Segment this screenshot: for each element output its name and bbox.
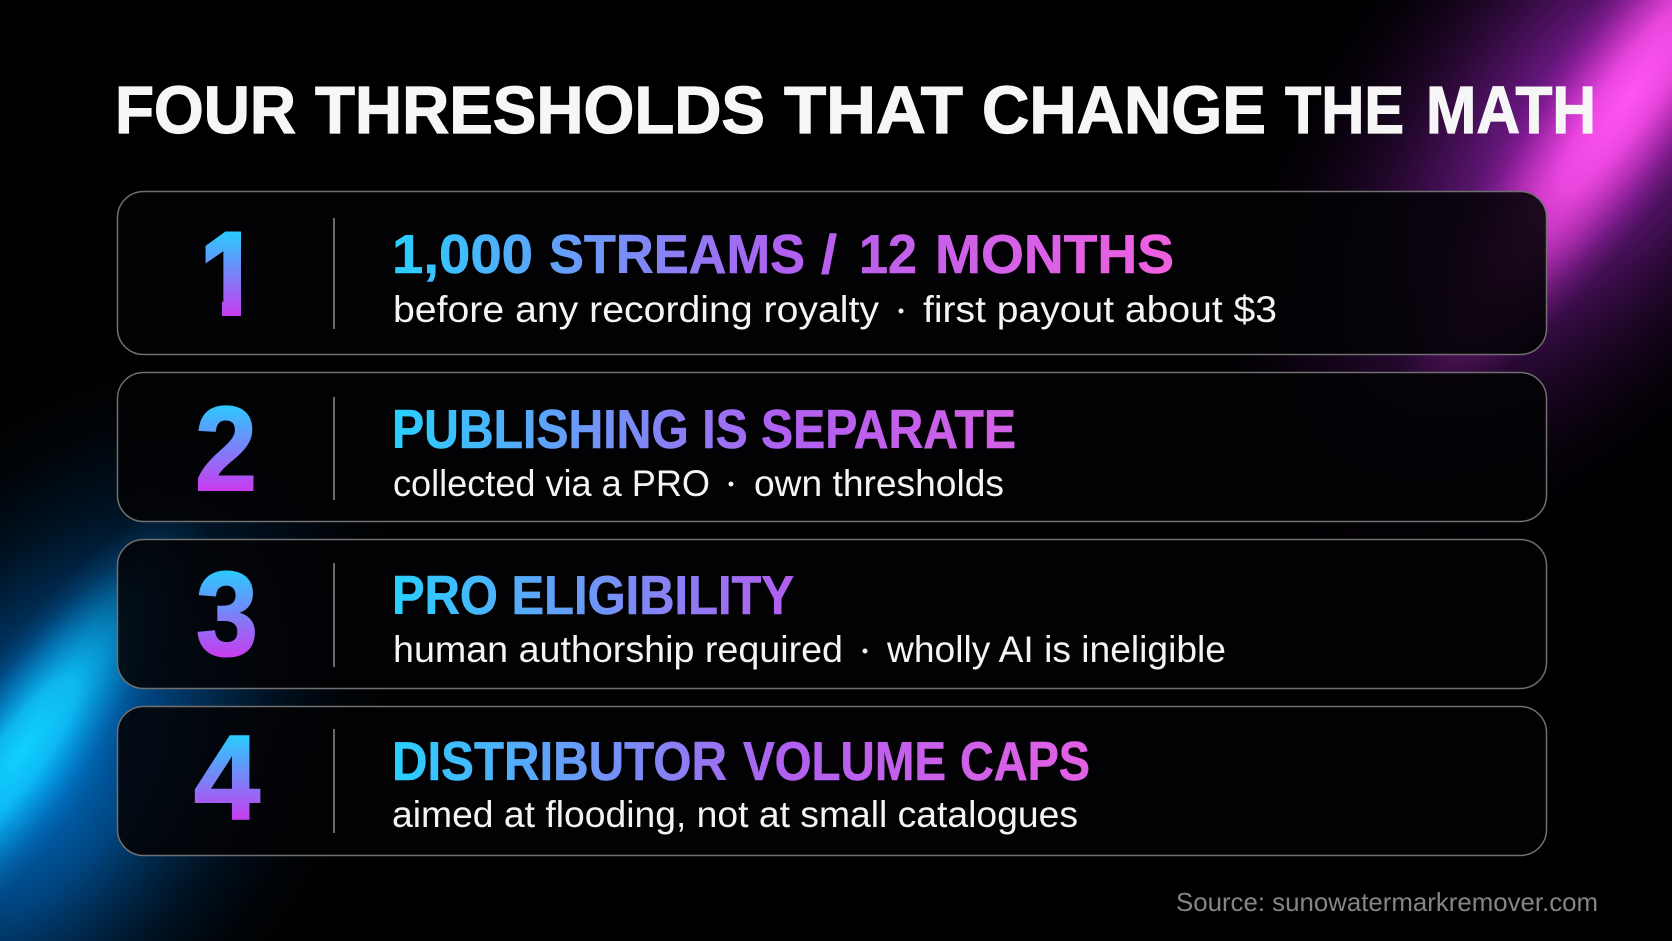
heading 3: PRO ELIGIBILITY bbox=[392, 564, 794, 626]
heading 4 bbox=[392, 730, 1090, 792]
title: FOUR bbox=[115, 73, 296, 148]
heading 1: STREAMS bbox=[549, 223, 805, 285]
description 2: collected via a PRO bbox=[393, 463, 710, 504]
panel: threshold 1 bbox=[118, 192, 1546, 354]
number 2: 2 bbox=[195, 382, 257, 516]
heading 2: PUBLISHING IS SEPARATE bbox=[392, 398, 1016, 460]
heading 1: 12 bbox=[859, 223, 917, 285]
pink corner glow bbox=[1060, 0, 1672, 600]
number 3: 3 bbox=[196, 547, 258, 681]
blue corner glow bbox=[0, 300, 560, 941]
heading 1: 1,000 bbox=[392, 223, 533, 285]
source note: Source: sunowatermarkremover.com bbox=[1176, 887, 1598, 917]
panel: threshold 4 bbox=[118, 706, 1546, 856]
description 2 bbox=[393, 463, 1004, 504]
panel: threshold 2 bbox=[118, 372, 1546, 522]
title bbox=[115, 73, 1596, 148]
heading 1 bbox=[392, 223, 1174, 285]
title: CHANGE bbox=[982, 73, 1266, 148]
number 4: 4 bbox=[194, 711, 260, 845]
description 4: aimed at flooding, not at small catalogues bbox=[392, 794, 1078, 835]
description 3: wholly AI is ineligible bbox=[886, 629, 1226, 670]
description 3 bbox=[393, 629, 1226, 670]
heading 4: VOLUME bbox=[743, 730, 946, 792]
description 1: before any recording royalty bbox=[393, 289, 880, 330]
description 1: first payout about $3 bbox=[923, 289, 1277, 330]
title: THAT bbox=[784, 73, 963, 148]
heading 4: DISTRIBUTOR bbox=[392, 730, 727, 792]
title: MATH bbox=[1426, 73, 1596, 148]
title: THE bbox=[1285, 73, 1404, 148]
panel: threshold 3 bbox=[118, 540, 1546, 688]
title: THRESHOLDS bbox=[315, 73, 765, 148]
number 1: 1 bbox=[200, 208, 260, 342]
heading 1: / bbox=[821, 223, 837, 285]
description 2: own thresholds bbox=[754, 463, 1004, 504]
heading 4: CAPS bbox=[960, 730, 1090, 792]
description 3: human authorship required bbox=[393, 629, 843, 670]
heading 1: MONTHS bbox=[935, 223, 1174, 285]
description 1 bbox=[393, 289, 1277, 330]
